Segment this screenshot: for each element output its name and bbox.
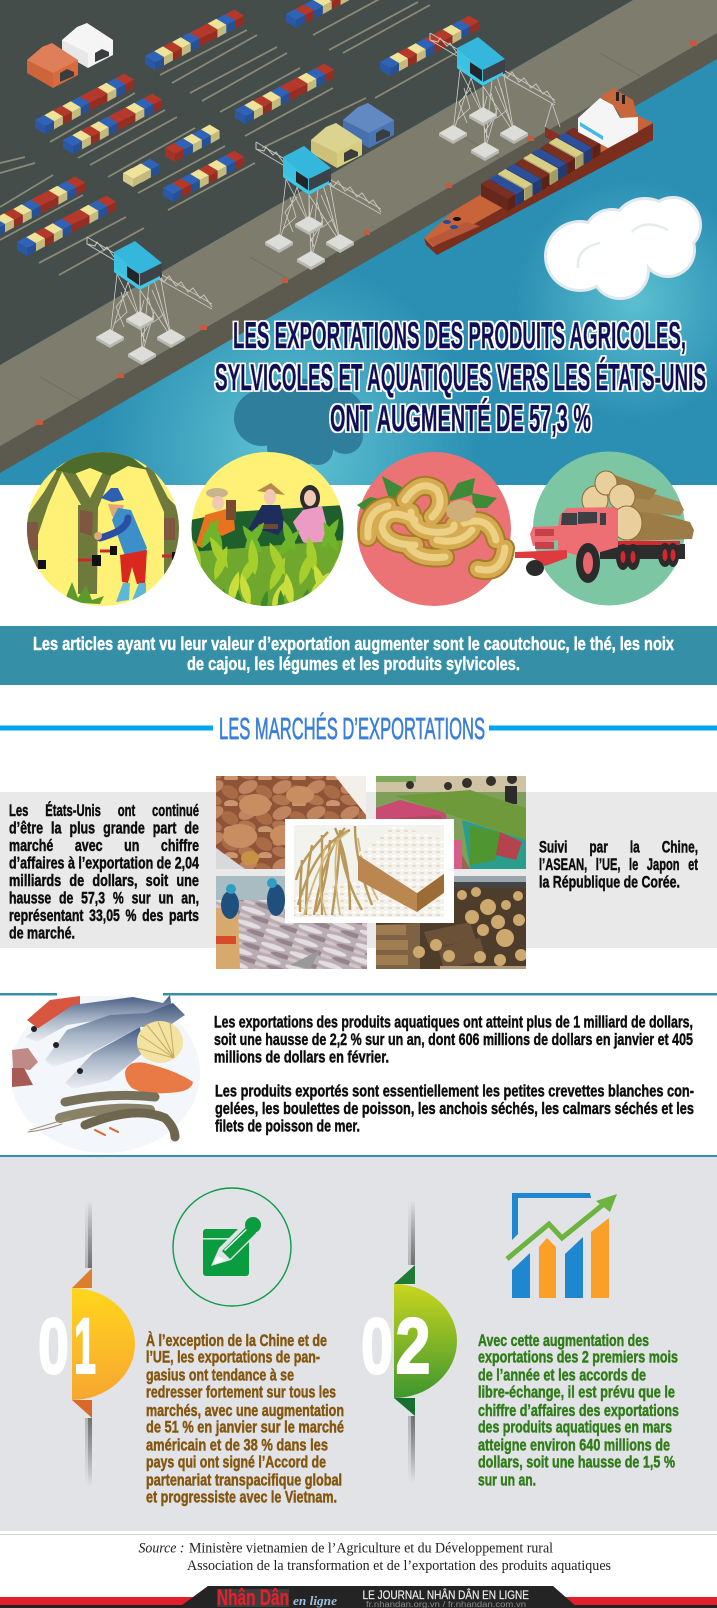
text block: other markets	[539, 838, 698, 892]
text block: item 01: l’UE, les exportations de pan-	[146, 1349, 320, 1367]
text block: United States: marché avec un chiffre	[9, 837, 199, 855]
heading: export markets	[0, 711, 717, 746]
cloud	[544, 196, 702, 300]
text block: United States: de marché.	[9, 924, 75, 942]
paragraph: products exported	[215, 1082, 694, 1136]
grey band	[0, 792, 717, 948]
source note	[138, 1540, 611, 1574]
text block: item 01: partenariat transpacifique global	[146, 1472, 342, 1490]
photo: market stall	[376, 774, 526, 869]
crane 3	[430, 33, 555, 161]
icon: note and pencil	[173, 1188, 291, 1306]
icon: tea pickers	[192, 452, 344, 606]
item 01 badge: 1	[74, 1301, 96, 1390]
text block: United States	[9, 801, 200, 942]
footer banner	[0, 1585, 717, 1608]
hero port illustration	[0, 0, 717, 485]
shed: yellow	[311, 123, 362, 168]
paragraph: export totals: millions de dollars en février.	[214, 1048, 389, 1066]
item 01 badge: 0	[38, 1301, 69, 1390]
hanging crate	[545, 103, 560, 141]
paragraph: products exported: filets de poisson de mer.	[215, 1118, 360, 1136]
source note: Ministère vietnamien de l’Agriculture et du Développement rural	[189, 1540, 553, 1556]
quay top	[0, 0, 717, 446]
text block: United States: représentant 33,05 % des parts	[9, 907, 199, 925]
logo: Nhân Dân en ligne: en ligne	[293, 1593, 337, 1608]
footer banner: LE JOURNAL NHÂN DÂN EN LIGNE	[362, 1587, 529, 1602]
cloud reflection	[234, 378, 365, 466]
text block: item 01: de 51 % en janvier sur le marché	[146, 1419, 344, 1437]
storage yard ground	[0, 0, 633, 365]
text block: item 02	[478, 1332, 679, 1490]
text block: item 01: redresser fortement sur tous les	[146, 1383, 336, 1401]
crane 1	[87, 237, 212, 365]
banner: items with rising export value: de cajou, les légumes et les produits sylvicoles.	[187, 654, 520, 674]
item 02 badge: 0	[361, 1301, 393, 1390]
shed: white	[62, 23, 113, 68]
container rows	[0, 0, 479, 256]
photo: fish processing	[216, 876, 367, 969]
shed: blue	[343, 103, 394, 148]
source note: Source :	[138, 1540, 184, 1556]
text block: United States: hausse de 57,3 % sur un an,	[9, 890, 199, 908]
item 02 badge: 2	[396, 1301, 430, 1390]
icon: cashew nuts	[357, 452, 511, 606]
cargo ship	[424, 88, 653, 255]
source note: Association de la transformation et de l’exportation des produits aquatiques	[187, 1558, 611, 1574]
text block: United States: d’affaires à l’exportation de 2,04	[9, 854, 200, 872]
text block: item 02: Avec cette augmentation des	[478, 1332, 649, 1350]
ship superstructure	[578, 88, 638, 148]
text block: item 01: américain et de 38 % dans les	[146, 1437, 328, 1455]
bollards	[36, 41, 697, 425]
heading: export markets: LES MARCHÉS D’EXPORTATIONS	[219, 711, 485, 746]
crane 2	[256, 142, 381, 270]
quay wall	[0, 33, 717, 473]
text block: United States: d’être la plus grande part de	[9, 820, 199, 838]
title	[215, 315, 706, 439]
text block: United States: Les États-Unis ont continué	[9, 801, 199, 820]
paragraph: export totals	[214, 1014, 693, 1066]
photo collage	[216, 774, 527, 969]
text block: item 01: gasius ont tendance à se	[146, 1367, 294, 1385]
shed: orange	[27, 43, 78, 88]
divider lines	[0, 993, 717, 1158]
photo: seafood	[10, 992, 200, 1153]
ship containers	[481, 127, 600, 211]
item 02 badge	[361, 1200, 457, 1483]
panel: forecasts	[0, 1157, 717, 1531]
icon: rising bar chart	[507, 1193, 617, 1298]
icon: logging truck	[515, 452, 694, 606]
photo: cashews	[216, 776, 366, 869]
text block: United States: milliards de dollars, soit une	[9, 872, 199, 890]
text block: item 02: de l’année et les accords de	[478, 1367, 646, 1385]
white strip below hero	[0, 485, 717, 626]
yard rails	[0, 0, 470, 275]
text block: item 01: et progressiste avec le Vietnam.	[146, 1489, 337, 1507]
photo: timber	[376, 876, 527, 969]
text block: item 01: marchés, avec une augmentation	[146, 1402, 344, 1420]
text block: item 02: sur un an.	[478, 1472, 536, 1490]
photo: rice box	[294, 825, 445, 917]
text block: aquatic products	[214, 1014, 694, 1136]
text block: item 01: À l’exception de la Chine et de	[146, 1331, 327, 1350]
text block: item 01: pays qui ont signé l’Accord de	[146, 1453, 326, 1471]
banner: items with rising export value	[0, 626, 717, 685]
icon: rubber tapper	[20, 452, 182, 606]
text block: item 01	[146, 1331, 344, 1507]
photo frame	[285, 819, 454, 923]
sea	[0, 0, 717, 485]
item 01 badge	[38, 1200, 135, 1487]
